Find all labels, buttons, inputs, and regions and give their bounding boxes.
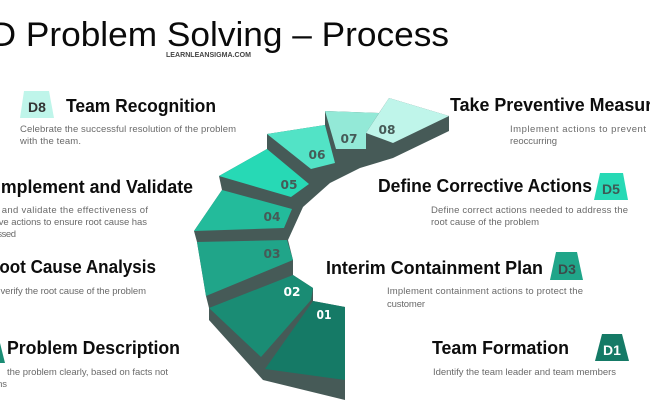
step 03: 03 bbox=[264, 246, 280, 261]
badge D1 bbox=[595, 334, 629, 361]
panel: D2 problem description bbox=[0, 338, 180, 390]
text D7 bbox=[510, 124, 650, 147]
badge D5: D5 bbox=[602, 181, 620, 197]
text D7: Implement actions to prevent bbox=[510, 124, 646, 135]
text D3 bbox=[387, 286, 583, 310]
website label: LEARNLEANSIGMA.COM bbox=[166, 50, 251, 59]
staircase dark side base bbox=[194, 98, 449, 400]
badge D8: D8 bbox=[28, 99, 46, 115]
heading D5: Define Corrective Actions bbox=[378, 176, 592, 196]
text D3: customer bbox=[387, 299, 425, 310]
heading D6: Implement and Validate bbox=[0, 177, 193, 197]
text D8: Celebrate the successful resolution of the problem bbox=[20, 124, 236, 135]
panel: D7 take preventive measures bbox=[450, 95, 650, 147]
step 06 bbox=[267, 125, 335, 169]
badge D8 bbox=[20, 91, 54, 118]
step 04: 04 bbox=[264, 209, 281, 224]
badge D2 bbox=[0, 343, 5, 363]
step 04 bbox=[194, 190, 292, 231]
staircase diagram bbox=[194, 98, 449, 400]
step 05 bbox=[219, 149, 309, 197]
panel: D4 root cause analysis bbox=[0, 257, 156, 297]
step 07 bbox=[325, 111, 379, 149]
step 08: 08 bbox=[378, 122, 396, 137]
heading D2: Problem Description bbox=[7, 338, 180, 358]
text D8 bbox=[19, 124, 236, 147]
text D8: with the team. bbox=[19, 136, 81, 147]
heading D8: Team Recognition bbox=[66, 96, 216, 116]
badge D1: D1 bbox=[603, 342, 621, 358]
heading D1: Team Formation bbox=[432, 338, 569, 358]
text D5: Define correct actions needed to address the bbox=[431, 205, 628, 216]
text D5 bbox=[431, 205, 628, 228]
badge D3: D3 bbox=[558, 261, 576, 277]
heading D3: Interim Containment Plan bbox=[326, 258, 543, 278]
step 01: 01 bbox=[316, 307, 332, 322]
step 08 bbox=[366, 98, 449, 143]
text D1: Identify the team leader and team members bbox=[433, 367, 616, 378]
step 03 bbox=[197, 240, 293, 296]
step 02: 02 bbox=[284, 284, 300, 299]
text D3: Implement containment actions to protect the bbox=[387, 286, 583, 297]
panel: D5 define corrective actions bbox=[378, 173, 628, 228]
text D2 bbox=[0, 367, 168, 390]
panel: D6 implement and validate bbox=[0, 177, 193, 240]
text D2: the problem clearly, based on facts not bbox=[7, 367, 168, 378]
step 06: 06 bbox=[308, 147, 326, 162]
badge D3 bbox=[550, 252, 583, 280]
panel: D3 interim containment plan bbox=[326, 252, 583, 310]
step 05: 05 bbox=[280, 177, 298, 192]
text D6 bbox=[0, 205, 148, 240]
step 07: 07 bbox=[340, 131, 358, 146]
text D7: reoccurring bbox=[510, 136, 557, 147]
step 01 bbox=[265, 301, 345, 380]
text D5: root cause of the problem bbox=[431, 217, 539, 228]
badge D5 bbox=[594, 173, 628, 200]
step 02 bbox=[209, 275, 313, 357]
panel: D1 team formation bbox=[432, 334, 629, 378]
panel: D8 team recognition bbox=[19, 91, 236, 147]
